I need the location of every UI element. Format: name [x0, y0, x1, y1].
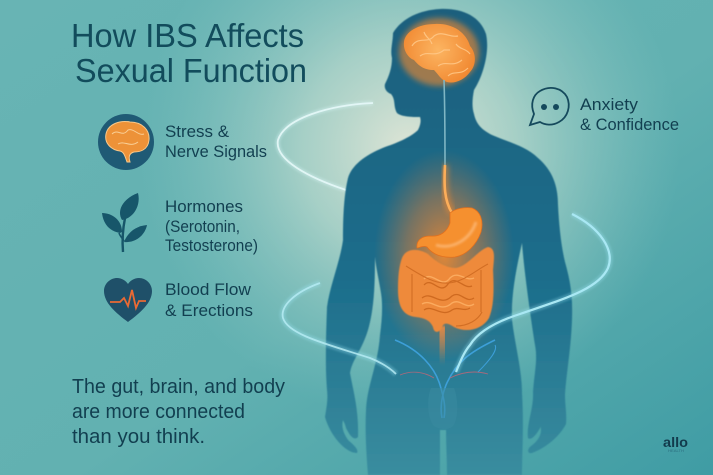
title	[71, 17, 307, 89]
icon: brain in circle	[98, 114, 154, 170]
label: Nerve Signals	[165, 142, 267, 161]
title: Sexual Function	[75, 52, 307, 89]
label	[165, 280, 253, 320]
label: Stress &	[165, 122, 230, 141]
human body silhouette	[325, 9, 572, 475]
label	[580, 95, 679, 134]
closing statement	[72, 376, 285, 448]
title: How IBS Affects	[71, 17, 304, 54]
logo: allo	[663, 434, 688, 450]
label	[165, 197, 258, 255]
pelvic nerves	[395, 340, 496, 418]
spinal nerve link	[444, 80, 452, 213]
logo: HEALTH	[668, 448, 684, 453]
stomach highlight	[436, 222, 476, 246]
item: hormones	[102, 193, 258, 255]
stomach	[417, 208, 482, 257]
icon: leaf sprig	[102, 193, 147, 252]
digestive system	[398, 208, 494, 365]
brain	[399, 18, 479, 86]
closing statement: The gut, brain, and body	[72, 376, 285, 398]
torso orange glow	[374, 150, 514, 360]
label: Hormones	[165, 197, 243, 216]
label: & Erections	[165, 301, 253, 320]
item: stress and nerve signals	[98, 114, 267, 170]
label: Testosterone)	[165, 236, 258, 255]
intestinal mass	[398, 247, 494, 332]
closing statement: are more connected	[72, 401, 245, 423]
small intestine	[422, 281, 474, 313]
label: & Confidence	[580, 115, 679, 134]
label: (Serotonin,	[165, 217, 240, 236]
item: blood flow	[104, 278, 253, 322]
label: Blood Flow	[165, 280, 252, 299]
label	[165, 122, 267, 161]
intestine highlights	[422, 275, 474, 307]
closing statement: than you think.	[72, 426, 205, 448]
lower right swoosh	[456, 214, 610, 372]
groin shape	[428, 388, 457, 429]
label: Anxiety	[580, 95, 639, 114]
icon: heart with pulse	[104, 278, 152, 322]
item: anxiety and confidence	[530, 88, 679, 134]
upper swoosh behind body	[278, 103, 373, 190]
rectum	[441, 326, 444, 365]
icon: speech bubble	[530, 88, 569, 125]
lower left swoosh	[283, 283, 396, 374]
colon haustra	[406, 264, 488, 326]
